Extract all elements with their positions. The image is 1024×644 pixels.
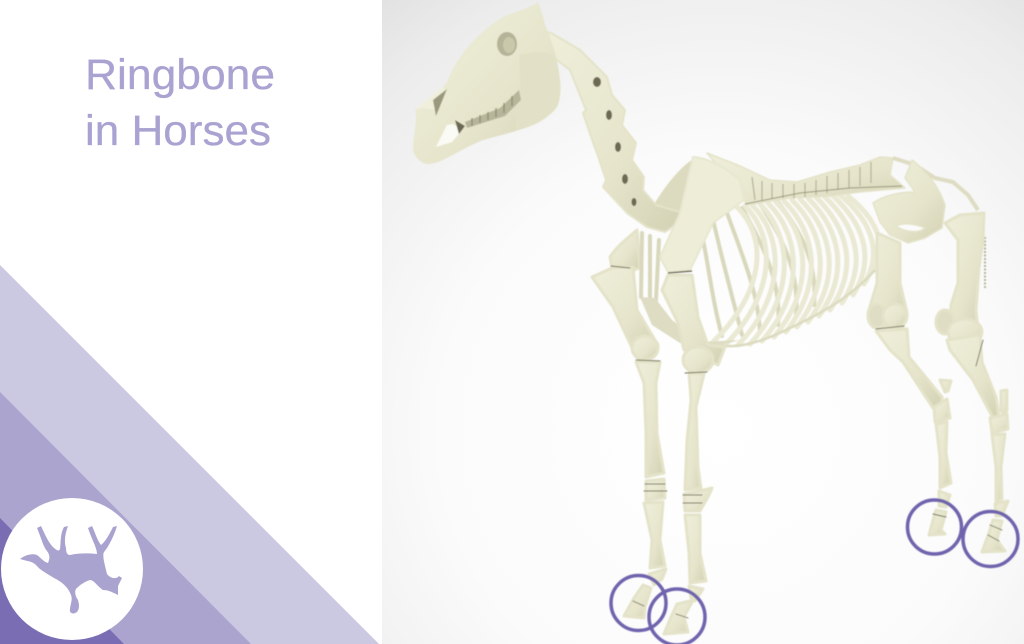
far foreleg [592,230,667,618]
circle: hoof hind right [963,512,1018,566]
near foreleg [662,275,725,634]
far hind leg [868,233,951,535]
panel: photo background [382,0,1024,644]
panel: diagonal purple bands [0,265,379,644]
tail [893,158,985,288]
icon: upside-down horse badge [1,498,143,640]
illustration: horse skeleton [413,2,1018,644]
neck vertebrae [543,30,683,232]
near ribs [712,195,880,345]
circle: hoof hind left [908,500,962,554]
belly band [712,270,875,346]
far scapula and withers [652,158,695,228]
far ribs [641,202,815,336]
pelvis [873,160,945,243]
title: Ringbone [85,51,275,99]
near hind leg [936,213,1008,552]
scapula [660,157,744,272]
circle: hoof front left [611,576,666,630]
neck foramina [593,77,636,206]
circle: hoof front right [649,589,705,644]
skull and jaw [413,2,560,164]
title: in Horses [85,107,271,155]
spine [707,153,905,205]
sternum [640,297,740,348]
elbow joint line [668,271,692,273]
